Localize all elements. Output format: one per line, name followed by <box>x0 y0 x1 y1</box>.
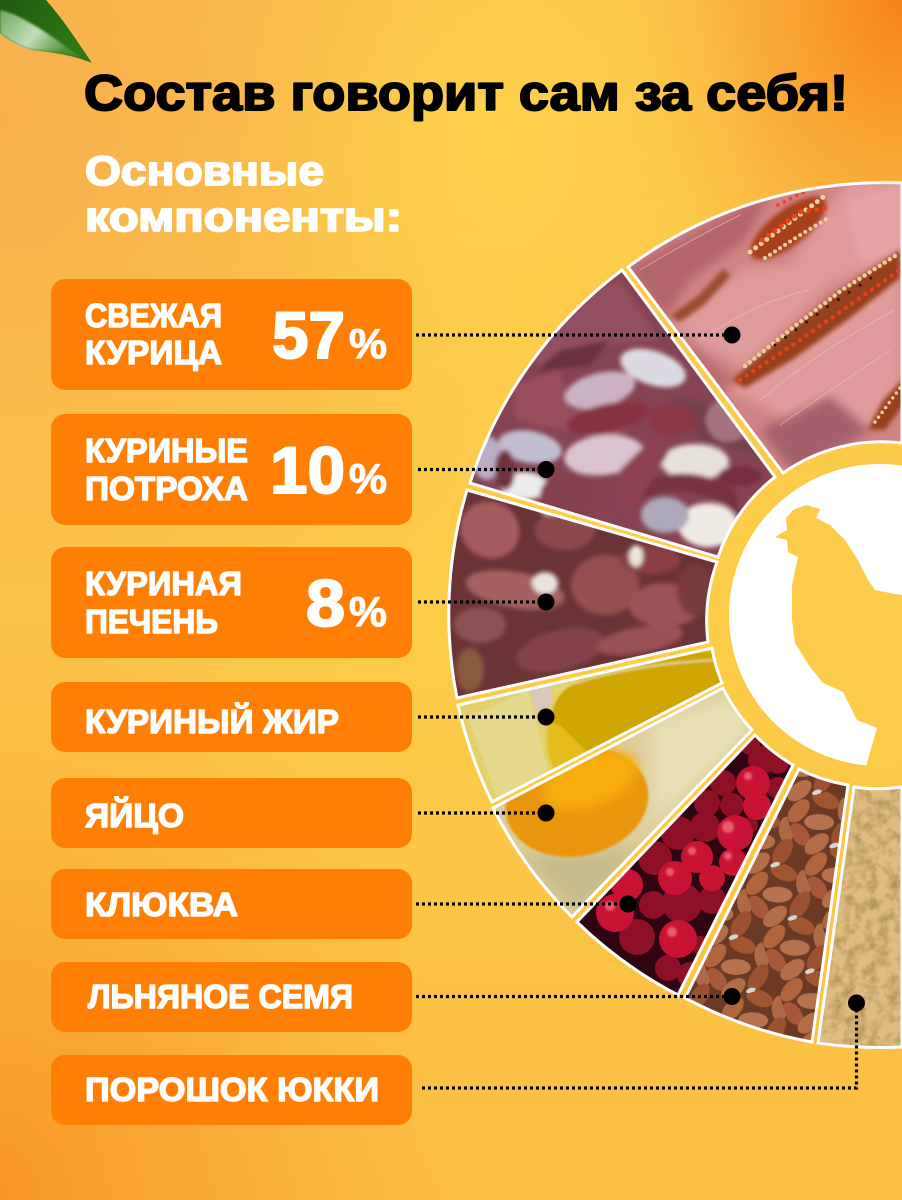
row: fresh chicken 57% <box>51 279 412 390</box>
row: giblets 10% <box>51 414 412 525</box>
connector: flax <box>416 988 740 1005</box>
row: egg: ЯЙЦО <box>85 796 184 834</box>
row: giblets 10%: 10 <box>270 433 345 507</box>
connector: egg <box>418 804 554 822</box>
segment: chicken giblets photo <box>468 268 777 559</box>
row: fresh chicken 57%: КУРИЦА <box>85 334 222 371</box>
row: yucca powder <box>51 1055 412 1125</box>
row: liver 8% <box>51 547 412 658</box>
segment: chicken fat photo <box>456 646 724 804</box>
connector: yucca <box>422 994 865 1088</box>
row: yucca powder: ПОРОШОК ЮККИ <box>85 1071 379 1108</box>
row: egg <box>51 778 412 848</box>
row: chicken fat: КУРИНЫЙ ЖИР <box>85 702 339 740</box>
row: liver 8%: ПЕЧЕНЬ <box>85 603 218 640</box>
row: giblets 10%: ПОТРОХА <box>85 470 248 507</box>
row: liver 8%: 8 <box>306 566 345 640</box>
heading: main components: компоненты: <box>85 193 402 240</box>
row: flax seed: ЛЬНЯНОЕ СЕМЯ <box>88 978 353 1015</box>
heading: main components <box>85 147 402 240</box>
connector: cranberry <box>416 896 636 912</box>
segment: flax seed photo <box>680 760 855 1050</box>
connector: giblets <box>418 461 554 478</box>
connector: chicken <box>416 326 740 344</box>
white disc <box>729 464 902 766</box>
panel: ingredient wheel <box>445 175 902 1055</box>
row: chicken fat <box>51 682 412 752</box>
segment: cranberry photo <box>570 730 800 1000</box>
row: fresh chicken 57%: 57 <box>272 298 345 372</box>
row: flax seed <box>51 962 412 1032</box>
segment: yucca powder photo <box>816 785 902 1049</box>
row: fresh chicken 57%: % <box>349 320 387 367</box>
heading: main components: Основные <box>85 147 324 194</box>
row: liver 8%: КУРИНАЯ <box>85 565 242 602</box>
panel: central disc with chicken <box>729 464 902 766</box>
row: fresh chicken 57%: СВЕЖАЯ <box>85 297 222 334</box>
icon: green leaf <box>0 0 92 63</box>
row: liver 8%: % <box>349 588 387 635</box>
title: Состав говорит сам за себя! <box>84 65 848 121</box>
segment: egg photo <box>485 680 760 925</box>
row: cranberry <box>51 869 412 939</box>
row: giblets 10%: % <box>349 455 387 502</box>
connector: fat <box>418 708 554 726</box>
segment: fresh chicken photo <box>620 175 902 480</box>
row: giblets 10%: КУРИНЫЕ <box>85 432 248 469</box>
connector: liver <box>418 594 554 610</box>
row: cranberry: КЛЮКВА <box>85 886 238 923</box>
segment: chicken liver photo <box>445 480 725 705</box>
icon: chicken silhouette <box>775 505 902 766</box>
